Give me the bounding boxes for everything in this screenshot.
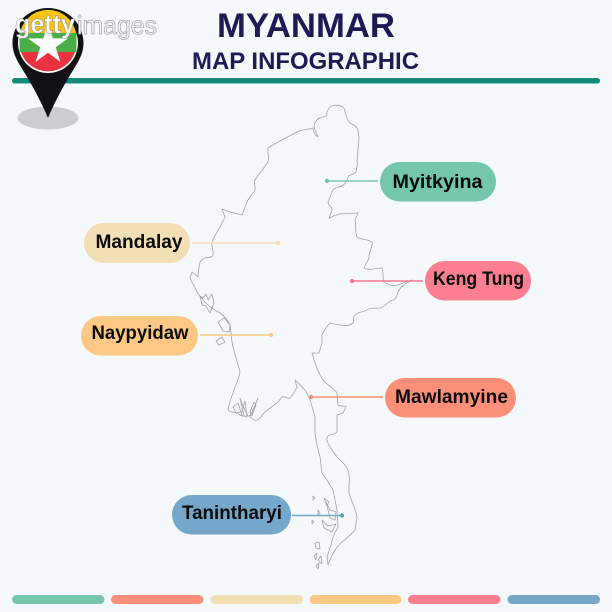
label text: Tanintharyi bbox=[182, 503, 282, 524]
watermark: getty images: getty bbox=[15, 9, 75, 39]
label text: Keng Tung bbox=[433, 269, 524, 290]
watermark: getty images: images bbox=[77, 10, 157, 40]
country outline bbox=[190, 105, 412, 565]
callout: Mawlamyine bbox=[309, 378, 516, 418]
leader line bbox=[292, 514, 342, 516]
Ayeyarwady delta inlets bbox=[233, 401, 256, 417]
subtitle line: map infographic: MAP INFOGRAPHIC bbox=[192, 48, 419, 75]
watermark: getty images bbox=[15, 9, 157, 40]
label pill bbox=[81, 316, 198, 356]
callout: Myitkyina bbox=[325, 162, 496, 202]
label pill bbox=[172, 495, 291, 534]
leader dot bbox=[276, 241, 280, 245]
leader line bbox=[311, 396, 383, 398]
leader line bbox=[352, 280, 423, 282]
leader dot bbox=[325, 179, 329, 183]
leader line bbox=[327, 180, 378, 182]
leader dot bbox=[340, 513, 344, 518]
callout: Keng Tung bbox=[350, 261, 531, 300]
leader dot bbox=[350, 279, 354, 283]
flag disc bbox=[18, 10, 78, 73]
label text: Mawlamyine bbox=[395, 387, 508, 408]
Mergui archipelago islands bbox=[312, 496, 336, 569]
callout: Tanintharyi bbox=[172, 495, 344, 534]
leader line bbox=[200, 334, 271, 336]
pin body bbox=[12, 8, 84, 118]
label pill bbox=[84, 223, 190, 263]
label text: Mandalay bbox=[96, 232, 183, 253]
leader dot bbox=[269, 333, 273, 337]
callout: Mandalay bbox=[84, 223, 280, 263]
title bbox=[192, 7, 419, 75]
pin shadow bbox=[18, 106, 78, 130]
label text: Naypyidaw bbox=[92, 323, 189, 344]
map of Myanmar bbox=[190, 105, 412, 569]
leader dot bbox=[309, 395, 313, 399]
header rule bbox=[12, 78, 600, 84]
label pill bbox=[385, 378, 516, 418]
label text: Myitkyina bbox=[392, 172, 483, 193]
Rakhine coastal islands bbox=[200, 294, 230, 345]
icon: map pin with Myanmar flag bbox=[12, 8, 84, 130]
callout: Naypyidaw bbox=[81, 316, 273, 356]
label pill bbox=[380, 162, 496, 202]
footer colour bars bbox=[12, 595, 600, 604]
label pill bbox=[425, 261, 531, 300]
title line: Myanmar: MYANMAR bbox=[217, 7, 395, 45]
leader line bbox=[192, 242, 278, 244]
